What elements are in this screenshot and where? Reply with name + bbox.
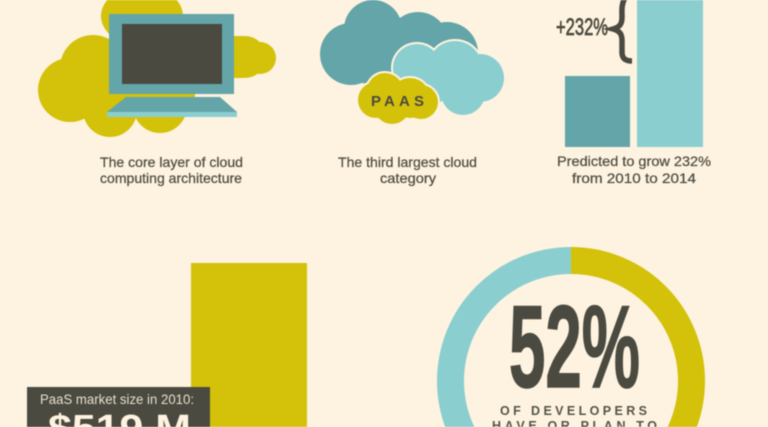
- icon: yellow PAAS cloud: [358, 73, 438, 124]
- icon: teal cloud: [320, 0, 478, 86]
- panel: growth bars: [556, 0, 711, 186]
- bar: 2010: [565, 76, 630, 147]
- callout: market size 2010: [27, 387, 210, 427]
- icon: light cloud: [393, 41, 504, 115]
- panel: core layer: [38, 0, 276, 186]
- bar: 2014: [637, 0, 703, 147]
- caption: growth: Predicted to grow 232%: [557, 153, 711, 169]
- label: +232%: +232%: [556, 14, 608, 41]
- caption: core layer: The core layer of cloud: [100, 154, 243, 170]
- stat description: OF DEVELOPERS: [500, 404, 647, 418]
- icon: laptop: [107, 14, 237, 117]
- donut chart: [450, 260, 692, 427]
- caption: core layer: computing architecture: [100, 170, 242, 186]
- panel: market size: [27, 263, 307, 427]
- icon: yellow PAAS cloud: PAAS: [371, 93, 424, 110]
- panel: third largest: [320, 0, 504, 186]
- brace: [613, 0, 632, 61]
- icon: yellow cloud: [38, 0, 276, 137]
- caption: third largest: [338, 154, 477, 186]
- caption: third largest: The third largest cloud: [338, 154, 477, 170]
- caption: third largest: category: [380, 170, 436, 186]
- caption: core layer: [100, 154, 243, 186]
- stat description: [492, 404, 657, 427]
- panel: developers donut: [450, 260, 692, 427]
- callout: market size 2010: PaaS market size in 2010:: [40, 392, 194, 407]
- stat: 52%: 52%: [509, 281, 640, 412]
- caption: growth: [557, 153, 711, 186]
- bar: market size: [191, 263, 307, 427]
- caption: growth: from 2010 to 2014: [572, 170, 696, 186]
